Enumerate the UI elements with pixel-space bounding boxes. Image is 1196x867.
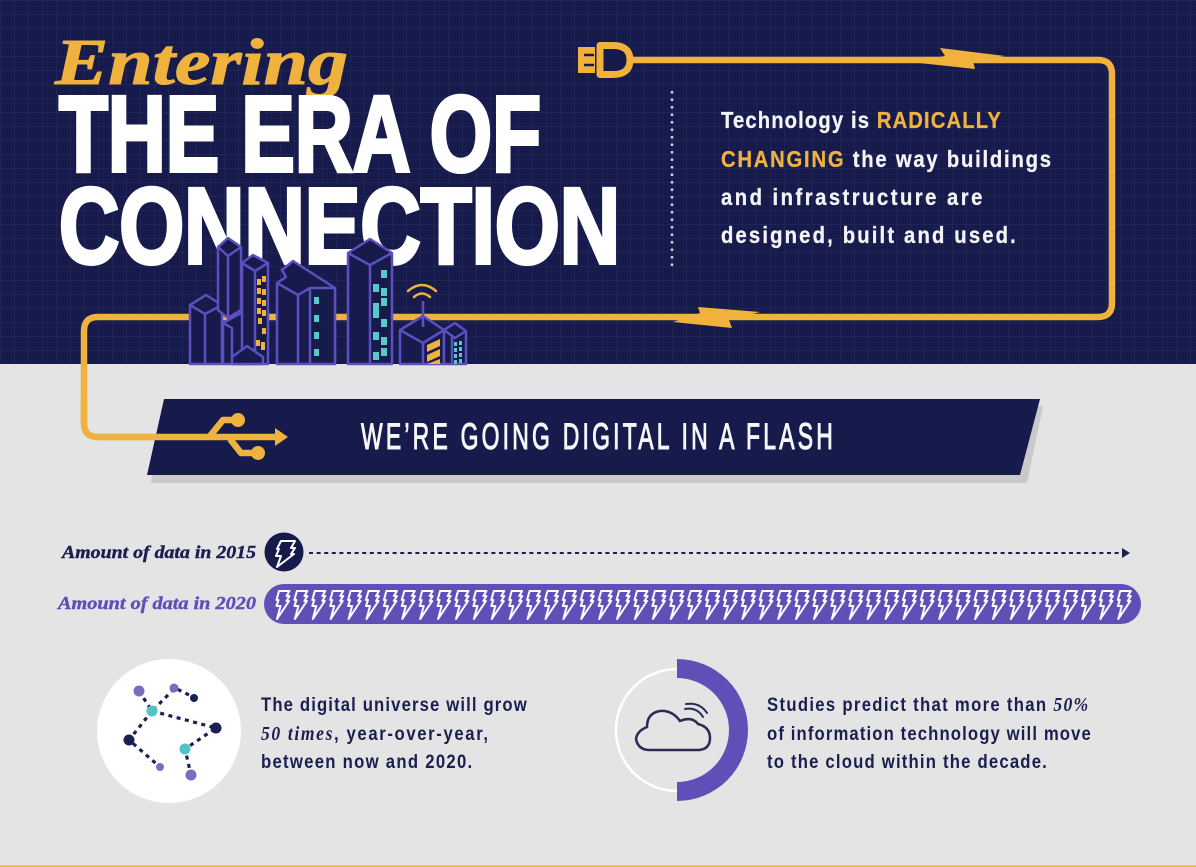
text: cloud prediction: of information technology will move: [767, 723, 1091, 744]
text: digital universe: 50 times, year-over-year,: [261, 723, 488, 745]
wide tower: [277, 261, 335, 364]
banner: we're going digital in a flash: WE’RE GOING DIGITAL IN A FLASH: [361, 415, 833, 457]
icon: cord spark top: [910, 48, 1005, 69]
text: digital universe: The digital universe will grow: [261, 694, 527, 715]
icon: cord spark bottom: [673, 307, 760, 328]
building far left: [190, 295, 222, 364]
small front block: [232, 346, 263, 364]
illustration: city skyline: [190, 238, 466, 364]
text: digital universe: [261, 694, 527, 772]
text: digital universe: between now and 2020.: [261, 751, 472, 772]
intro text: and infrastructure are: [721, 184, 982, 210]
power cord with plug and lightning bolts: [84, 46, 1112, 437]
title: Entering: Entering: [54, 26, 348, 99]
banner shadow: [151, 406, 1043, 483]
text: cloud prediction: Studies predict that more than 50%: [767, 694, 1088, 716]
dotted divider: [671, 91, 673, 268]
short building with antenna: [400, 316, 444, 364]
tallest tower: [348, 239, 392, 364]
icon: data constellation: [97, 659, 241, 803]
title: THE ERA OF: THE ERA OF: [59, 73, 541, 194]
intro text: designed, built and used.: [721, 222, 1016, 248]
title: CONNECTION: CONNECTION: [59, 165, 620, 286]
intro text: [721, 107, 1051, 248]
yellow windows: [256, 276, 266, 350]
low block: [223, 308, 250, 364]
bar: 2020 lightning bolts: [264, 584, 1141, 624]
label: amount of data in 2015: Amount of data in 2015: [61, 542, 256, 562]
icon: plug: [578, 46, 630, 74]
teal grid windows: [454, 341, 462, 364]
header panel: [0, 0, 1196, 364]
teal windows tall: [373, 270, 387, 360]
icon: 2015 lightning badge: [264, 532, 304, 572]
tall thin tower: [218, 238, 241, 318]
tower with yellow windows: [242, 255, 268, 364]
intro text: CHANGING the way buildings: [721, 146, 1051, 172]
text: cloud prediction: [767, 694, 1091, 772]
title: [54, 26, 620, 286]
intro text: Technology is RADICALLY: [721, 107, 1001, 133]
chart: cloud donut 50%: [616, 659, 748, 801]
icon: wifi signal: [408, 285, 436, 297]
small right building: [444, 323, 466, 364]
teal windows wide: [314, 297, 319, 356]
label: amount of data in 2020: Amount of data in 2020: [57, 593, 256, 613]
icon: cloud: [636, 704, 710, 750]
yellow stripes: [427, 339, 440, 364]
dotted arrow 2015: [309, 548, 1130, 558]
banner: we're going digital in a flash: [147, 399, 1040, 475]
icon: USB symbol and cord end: [84, 395, 288, 460]
text: cloud prediction: to the cloud within the decade.: [767, 751, 1047, 772]
